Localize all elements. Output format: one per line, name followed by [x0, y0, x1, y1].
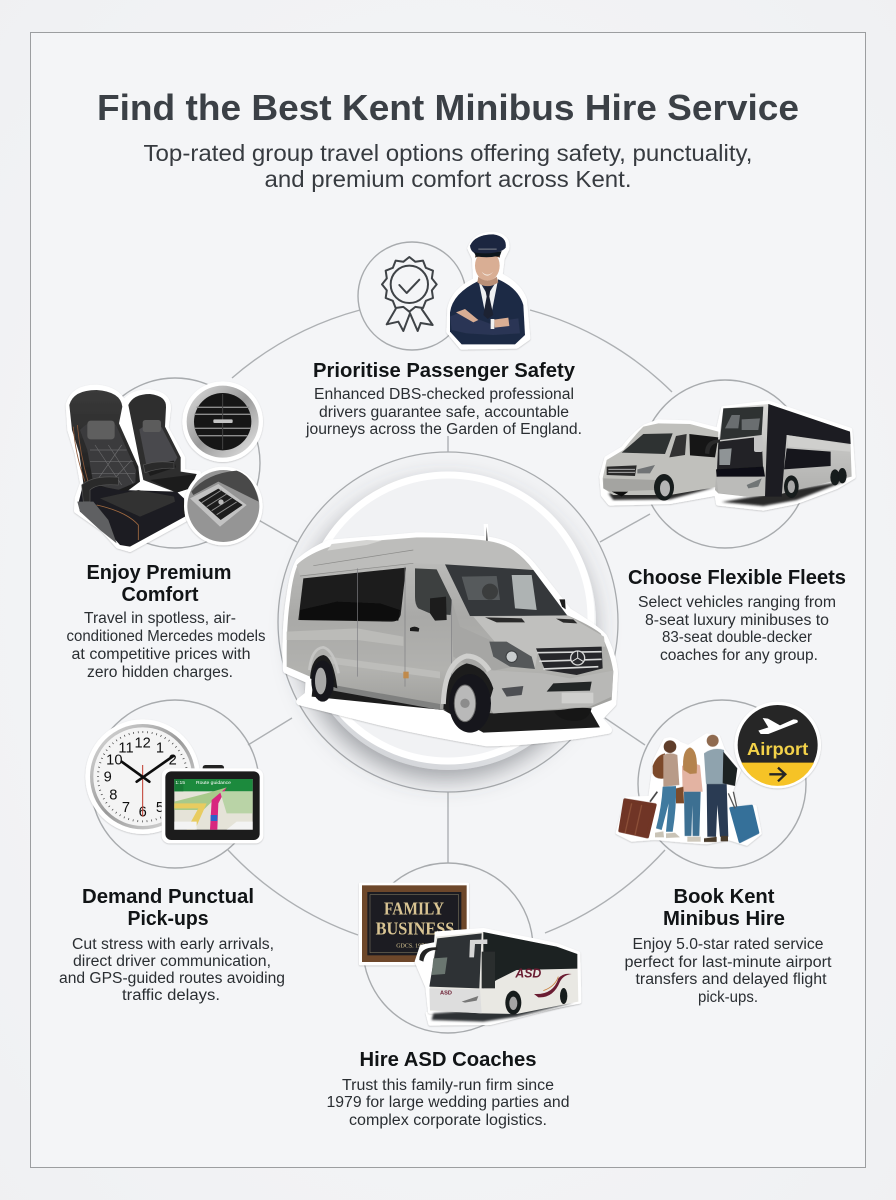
body text: Travel in spotless, air- [84, 610, 236, 627]
heading: Demand Punctual [82, 886, 254, 908]
orbit connector lines [228, 310, 672, 935]
panel: book Kent minibus hire [617, 702, 832, 1006]
illustration: wall clock and GPS unit: 1:15 [175, 780, 185, 786]
body text: drivers guarantee safe, accountable [319, 404, 569, 421]
body text: 83-seat double-decker [662, 629, 812, 646]
body text [66, 610, 266, 681]
body text: at competitive prices with [72, 646, 250, 663]
body text: Select vehicles ranging from [638, 594, 836, 611]
illustration: wall clock and GPS unit: 7 [122, 800, 130, 816]
heading: Prioritise Passenger Safety [313, 360, 576, 382]
illustration: travellers with suitcases and airport sign: Airport [747, 739, 809, 759]
body text: 1979 for large wedding parties and [326, 1094, 570, 1111]
body text: Enjoy 5.0-star rated service [632, 936, 824, 953]
body text: Cut stress with early arrivals, [72, 936, 274, 953]
heading [86, 562, 232, 606]
illustration: wall clock and GPS unit: 12 [135, 735, 151, 751]
body text: direct driver communication, [73, 953, 271, 970]
illustration: family business plaque and ASD coach: GDCS. 1979 [396, 944, 427, 950]
subtitle: Top-rated group travel options offering safety, punctuality, [144, 140, 752, 166]
illustration: family business plaque and ASD coach: FAMILY [384, 898, 444, 918]
illustration: wall clock and GPS unit [85, 719, 263, 843]
illustration: wall clock and GPS unit: Route guidance [196, 780, 231, 786]
body text: Trust this family-run firm since [342, 1077, 554, 1094]
panel: enjoy premium comfort [66, 381, 266, 681]
body text: complex corporate logistics. [349, 1112, 547, 1129]
illustration: family business plaque and ASD coach: ASD [514, 965, 542, 980]
subtitle: and premium comfort across Kent. [264, 166, 632, 192]
body text [624, 936, 832, 1006]
body text: 8-seat luxury minibuses to [645, 612, 829, 629]
illustration: travellers with suitcases and airport sign [617, 702, 821, 844]
illustration: wall clock and GPS unit: 11 [118, 741, 134, 757]
heading: Enjoy Premium [86, 562, 232, 584]
panel: prioritise passenger safety [305, 234, 582, 438]
illustration: family business plaque and ASD coach [359, 883, 579, 1024]
heading [82, 886, 254, 930]
heading: Pick-ups [128, 908, 208, 930]
illustration: wall clock and GPS unit: 2 [169, 752, 177, 768]
heading: Choose Flexible Fleets [628, 567, 846, 589]
body text [59, 936, 285, 1004]
illustration: leather seats and air vents [68, 381, 263, 549]
body text: conditioned Mercedes models [66, 628, 266, 645]
satellite rings [90, 242, 809, 1033]
body text: coaches for any group. [660, 647, 818, 664]
body text: Enhanced DBS-checked professional [314, 386, 574, 403]
illustration: wall clock and GPS unit: 5 [156, 800, 164, 816]
body text: and GPS-guided routes avoiding [59, 970, 285, 987]
panel: hire ASD coaches [326, 883, 579, 1129]
body text [638, 594, 836, 664]
illustration: wall clock and GPS unit: 10 [106, 752, 122, 768]
illustration: wall clock and GPS unit: 1 [156, 741, 164, 757]
body text: zero hidden charges. [87, 664, 233, 681]
body text: journeys across the Garden of England. [305, 421, 582, 438]
title: Find the Best Kent Minibus Hire Service [97, 87, 799, 128]
body text [326, 1077, 570, 1129]
panel: choose flexible fleets [602, 403, 853, 664]
illustration: chauffeur in navy uniform [448, 234, 528, 348]
illustration: wall clock and GPS unit: 8 [109, 787, 117, 803]
illustration: wall clock and GPS unit: 9 [104, 770, 112, 786]
body text: perfect for last-minute airport [624, 954, 832, 971]
illustration: wall clock and GPS unit: 6 [139, 805, 147, 821]
body text: pick-ups. [698, 989, 758, 1006]
icon: award rosette with check [382, 257, 437, 331]
illustration: minibus and double-decker coach [602, 403, 853, 508]
illustration: family business plaque and ASD coach: BUSINESS [376, 918, 454, 938]
heading [663, 886, 785, 930]
body text: transfers and delayed flight [636, 971, 827, 988]
heading: Comfort [122, 584, 199, 606]
heading: Minibus Hire [663, 908, 785, 930]
panel: demand punctual pick-ups [59, 719, 285, 1004]
illustration: silver Mercedes minibus [286, 524, 614, 743]
heading: Hire ASD Coaches [360, 1049, 536, 1071]
illustration: family business plaque and ASD coach: ASD [440, 991, 452, 997]
heading: Book Kent [674, 886, 775, 908]
subtitle [144, 140, 752, 192]
central hub disc [278, 452, 618, 792]
body text [305, 386, 582, 438]
body text: traffic delays. [122, 987, 220, 1004]
